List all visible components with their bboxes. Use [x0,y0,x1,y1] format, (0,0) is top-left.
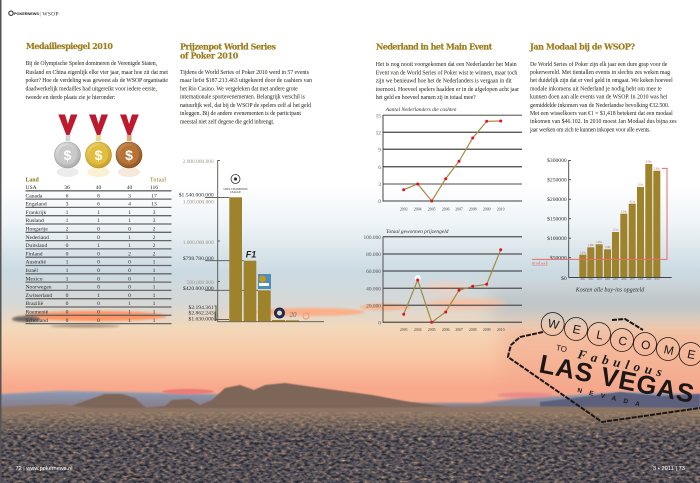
bar chart: kosten alle buy-ins: 2002 [588,278,594,281]
medal table: 1 [128,235,131,241]
medal table: 1 [97,210,100,216]
intro text: Het is nog nooit voorgekomen dat een Nederlander het Main [376,62,517,68]
medal table: 40 [96,185,102,191]
bar chart: kosten alle buy-ins: 2001 [580,278,586,281]
line chart: totaal gewonnen prijzengeld: 2007 [455,328,463,332]
intro text: Event van de World Series of Poker wist te winnen, maar toch [376,69,517,76]
medal table: 0 [128,285,131,291]
icon: event logo: 20 [290,311,297,319]
medal table: 1 [128,218,131,224]
bar chart: prize pools: $798.780.000 [183,255,214,262]
bar chart: kosten alle buy-ins: $50000 [550,255,567,262]
line chart: totaal gewonnen prijzengeld: 2010 [497,328,505,332]
medal table: 0 [97,301,100,307]
bar chart: kosten alle buy-ins: $200000 [547,196,567,203]
bar chart: kosten alle buy-ins: 6,29x [646,161,652,164]
heading: Nederland in het Main Event [376,42,493,52]
icon: F1 logo: F1 [246,250,256,260]
line chart: totaal gewonnen prijzengeld: 20.000 [366,304,381,310]
medal table: 0 [97,226,100,232]
medal table: 0 [97,285,100,291]
medal table: 0 [66,293,69,299]
medal table: Finland [26,251,43,257]
illustration: Welcome to Fabulous Las Vegas sign: E [686,347,697,362]
bar chart: prize pools: $1.630.000 [189,316,214,323]
medal table: 0 [128,293,131,299]
medal table: 1 [153,301,156,307]
bar chart: prize pools: $420.000.000 [183,285,214,292]
medal table: 13 [151,202,157,208]
medal table: 0 [66,310,69,316]
medal table: 2 [153,226,156,232]
line chart: totaal gewonnen prijzengeld: 2009 [483,328,491,332]
medal table: 0 [97,276,100,282]
intro text: Rusland en China eigenlijk elke vier jaar, maar hoe zit dat met [26,70,168,76]
medal table: 1 [66,210,69,216]
medal table: 8 [97,193,100,199]
line chart: totaal gewonnen prijzengeld: 100.000 [363,235,381,241]
illustration: Welcome to Fabulous Las Vegas sign: W [547,316,561,332]
bar chart: kosten alle buy-ins: 2006 [621,278,627,281]
medal table: 3 [128,193,131,199]
line chart: aantal Nederlanders die cashten: 2004 [414,207,422,211]
bar chart: kosten alle buy-ins: 2007 [630,278,635,281]
medal table: Rusland [26,218,44,224]
medal table: 4 [128,202,131,208]
line chart: aantal Nederlanders die cashten [376,107,522,211]
intro text: zijn we benieuwd hoe het de Nederlanders is vergaan in dit [376,79,512,85]
medal table: Hongarije [26,226,48,232]
medal table: 0 [66,243,69,249]
line chart: totaal gewonnen prijzengeld: 2003 [400,328,408,332]
line chart: aantal Nederlanders die cashten: 0 [378,199,381,205]
intro text [180,69,312,125]
bar chart: kosten alle buy-ins: 1,24x [580,252,586,254]
bar chart: kosten alle buy-ins: 2004 [605,278,611,281]
line chart: aantal Nederlanders die cashten: 6 [378,165,381,171]
medal table: Schotland [26,318,48,324]
medal table: 6 [66,193,69,199]
medal table: Mexico [26,276,43,282]
header: publication logo and section: POKERNEWS [14,11,39,16]
line chart: totaal gewonnen prijzengeld: 2008 [469,328,477,332]
illustration: Welcome to Fabulous Las Vegas sign: Fabulous [575,346,664,380]
icon: silver medal [54,114,80,177]
illustration: Welcome to Fabulous Las Vegas sign: NEVADA [577,387,641,408]
illustration: Welcome to Fabulous Las Vegas sign: M [662,342,675,358]
heading [180,42,276,60]
medal table: Totaal [150,178,166,184]
intro text: Bij de Olympische Spelen domineren de Verenigde Staten, [26,61,158,67]
line chart: aantal Nederlanders die cashten: 2003 [400,207,408,211]
medal table: Israël [26,268,38,274]
intro text: het Rio Casino. We vergeleken dat met andere grote [180,86,298,92]
header: publication logo and section: | WSOP [40,11,58,17]
icon: Champions League logo [223,174,248,194]
medal table: 1 [97,218,100,224]
medal table: 2 [153,243,156,249]
line chart: totaal gewonnen prijzengeld: 40.000 [366,286,381,292]
intro text: Met een wisselkoers van €1 = $1,418 betekent dat een modaal [530,110,673,117]
medal table: 1 [153,260,156,266]
intro text: kunnen doen aan alle events van de WSOP. In 2010 was het [530,95,668,101]
medal table: 36 [64,185,70,191]
bar chart: kosten alle buy-ins: 5,01x [638,184,644,187]
medal table: 0 [128,276,131,282]
medal table: 1 [153,318,156,324]
panel: Prijzenpot World Series of Poker 2010 [179,42,324,323]
intro text: natuurlijk wel, dat bij de WSOP de spelers zelf al het geld [180,102,311,109]
medal table: 0 [97,268,100,274]
icon: silver medal: $ [64,147,72,163]
medal table: 1 [153,293,156,299]
medal table: 2 [153,251,156,257]
medal table: 1 [128,243,131,249]
medal table: 0 [97,235,100,241]
icon: ring logo [303,313,309,319]
medal table: 0 [66,301,69,307]
line chart: aantal Nederlanders die cashten: 2009 [483,207,491,211]
medal table: 3 [66,202,69,208]
panel: Jan Modaal bij de WSOP? [529,42,677,294]
line chart: aantal Nederlanders die cashten: 2008 [469,207,477,211]
medal table: Australië [26,260,47,266]
medal table: 1 [128,310,131,316]
medal table: Canada [26,193,43,199]
icon: bronze medal [116,114,142,177]
intro text [529,61,677,133]
intro text: internationale sportevenementen. Belangrijk verschil is [180,95,306,101]
medal table: 2 [153,235,156,241]
medal table: 0 [128,226,131,232]
medal table: Nederland [26,235,49,241]
intro text: tweede en derde plaats zie je hieronder: [26,95,116,101]
line chart: totaal gewonnen prijzengeld: 0 [378,320,381,326]
bar chart: kosten alle buy-ins: 2010 [654,278,660,281]
illustration: Welcome to Fabulous Las Vegas sign: E [571,322,582,337]
medal table: Land [26,178,39,184]
medal table: 1 [128,301,131,307]
intro text: toernooi. Hoeveel spelers haalden er in de afgelopen acht jaar [376,86,519,93]
icon: gold medal: $ [95,147,103,163]
intro text: poker? Hoe de verdeling was geweest als de WSOP organisatie [26,78,168,84]
intro text: inkomen van $46.102. In 2010 moest Jan Modaal dus bijna zes [530,118,677,125]
bar chart: prize pools: $2.194.361 [189,304,214,311]
line chart: totaal gewonnen prijzengeld: Totaal gewonnen prijzengeld [386,229,449,235]
bar chart: kosten alle buy-ins: 4,11x [629,200,636,203]
medal table: 0 [97,260,100,266]
medal table: 3 [153,218,156,224]
icon: World Cup logo [258,274,271,289]
chart caption: Kosten alle buy-ins opgeteld [575,288,645,294]
footer: left page number: 72 | www.pokernews.nl [16,466,72,472]
heading: Jan Modaal bij de WSOP? [529,42,635,52]
intro text [376,62,519,101]
medal table: 1 [97,293,100,299]
line chart: aantal Nederlanders die cashten: 2005 [428,207,436,211]
medal table: 0 [97,310,100,316]
callout: modaal inkomen line: modaal [532,262,547,266]
bar chart: kosten alle buy-ins: $0 [561,275,567,282]
bar chart: kosten alle buy-ins: 3,54x [621,210,627,213]
line chart: totaal gewonnen prijzengeld: 2006 [442,328,450,332]
medal table: Frankrijk [26,210,47,216]
illustration: Welcome to Fabulous Las Vegas sign: O [640,337,652,353]
heading: of Poker 2010 [180,50,239,60]
medal table: 1 [66,268,69,274]
line chart: aantal Nederlanders die cashten: 2010 [497,207,505,211]
medal table: 1 [128,318,131,324]
intro text: daadwerkelijk medailles had uitgereikt voor iedere eerste, [26,87,158,93]
medal table: 0 [97,318,100,324]
bar chart: kosten alle buy-ins: 2,51x [613,229,619,232]
heading: Medaillespiegel 2010 [26,41,113,51]
intro text: maar liefst $187.213.463 uitgekeerd door de cashiers van [180,77,312,84]
illustration: Welcome to Fabulous Las Vegas sign: TO [555,343,568,354]
medal table: Noorwegen [26,285,52,291]
icon: Champions League logo: UEFA CHAMPIONS [223,188,248,191]
medal table: 1 [153,276,156,282]
line chart: aantal Nederlanders die cashten: 9 [378,148,381,154]
intro text: gemiddelde inkomen van de Nederlandse bevolking €32.500. [530,103,670,109]
medal table: 6 [97,202,100,208]
line chart: aantal Nederlanders die cashten: 3 [378,182,381,188]
bar chart: kosten alle buy-ins: $250000 [547,176,567,184]
line chart: aantal Nederlanders die cashten: Aantal Nederlanders die cashten [385,107,457,113]
line chart: totaal gewonnen prijzengeld: 2005 [428,328,436,332]
medal table: Brazilië [26,301,44,307]
medal table: 2 [128,251,131,257]
bar chart: kosten alle buy-ins: 2008 [638,278,644,281]
heading: Prijzenpot World Series [180,42,276,52]
medal table: 1 [66,285,69,291]
medal table: Roemenië [26,310,49,316]
medal table: 40 [127,185,132,191]
medal table: Zwitserland [26,293,52,299]
illustration: Welcome to Fabulous Las Vegas sign [508,312,700,422]
intro text: modale inkomens uit Nederland je nodig hebt om mee te [530,86,662,92]
medal table: 1 [66,218,69,224]
intro text [26,61,168,101]
medal table: 1 [97,243,100,249]
bar chart: kosten alle buy-ins: 2005 [613,278,619,281]
bar chart: kosten alle buy-ins [532,157,672,294]
panel: Medaillespiegel 2010 [26,41,172,324]
intro text: inleggen. Bij de andere evenementen is de participant [180,111,301,117]
medal table: 17 [151,193,157,199]
illustration: Welcome to Fabulous Las Vegas sign: LAS VEGAS [537,348,697,409]
panel: Nederland in het Main Event [363,42,522,332]
header: publication logo and section [9,11,59,17]
bar chart: kosten alle buy-ins: 1,85x [596,241,603,244]
medal table: 1 [128,210,131,216]
medal table: 1 [153,285,156,291]
medal table: 0 [128,268,131,274]
bar chart: prize pools: $1.540.000.000 [179,192,214,199]
bar chart: kosten alle buy-ins: 1,68x [588,244,594,247]
medal table: 0 [66,251,69,257]
bar chart: prize pools: 500.000.000 [187,280,214,286]
bar chart: prize pools: 1.500.000.000 [183,200,214,206]
medal table: 2 [66,226,69,232]
illustration: Welcome to Fabulous Las Vegas sign: L [595,328,605,343]
line chart: totaal gewonnen prijzengeld: 80.000 [366,252,381,258]
intro text: het duidelijk zijn dat er veel geld in omgaat. We keken hoeveel [530,78,673,84]
bar chart: kosten alle buy-ins: 2009 [646,278,652,281]
medal table: 1 [66,260,69,266]
medal table: Duitsland [26,243,47,249]
medal table: 3 [153,210,156,216]
medal table: 1 [66,276,69,282]
footer: right page number: 3 • 2011 | 73 [653,466,685,472]
icon: seal logo [274,308,285,318]
icon: bronze medal: $ [125,147,133,163]
bar chart: prize pools: 1.000.000.000 [183,240,214,246]
bar chart: kosten alle buy-ins: 1,59x [605,246,611,249]
icon: gold medal [86,114,112,177]
bar chart: kosten alle buy-ins: 5,92x [654,167,660,170]
bar chart: kosten alle buy-ins: $300000 [547,157,567,164]
line chart: totaal gewonnen prijzengeld: 2004 [414,328,422,332]
bar chart: prize pools: $2.862.243 [189,310,214,317]
intro text: De World Series of Poker zijn elk jaar een dure grap voor de [530,61,668,68]
bar chart: kosten alle buy-ins: $150000 [547,216,567,222]
medal table: 1 [153,310,156,316]
bar chart: prize pools: 2.000.000.000 [183,159,214,165]
medal table: 0 [128,260,131,266]
medal table: 1 [66,235,69,241]
illustration: Welcome to Fabulous Las Vegas sign: C [617,333,629,349]
line chart: aantal Nederlanders die cashten: 2007 [455,207,463,211]
intro text: meestal niet zelf degene die geld inbrengt. [180,118,275,125]
icon: Champions League logo: LEAGUE [230,191,241,194]
line chart: aantal Nederlanders die cashten: 12 [376,130,381,136]
bar chart: prize pools [179,159,324,323]
bar chart: kosten alle buy-ins: 2003 [597,278,602,281]
intro text: het geld en hoeveel namen zij in totaal mee? [376,95,476,101]
medal table: Engeland [26,202,47,208]
line chart: aantal Nederlanders die cashten: 15 [376,114,381,120]
medal table: 0 [97,251,100,257]
line chart: aantal Nederlanders die cashten: 2006 [442,207,450,211]
intro text: Tijdens de World Series of Poker 2010 werd in 57 events [180,69,310,76]
intro text: jaar werken om zich te kunnen inkopen voor alle events. [529,127,651,133]
line chart: totaal gewonnen prijzengeld [363,229,522,332]
medal table: 1 [153,268,156,274]
bar chart: kosten alle buy-ins: $100000 [547,235,567,242]
medal table: 116 [150,185,158,191]
medal table: 0 [66,318,69,324]
medal table [26,178,172,324]
intro text: pokerwereld. Met tientallen events in slechts zes weken mag [530,70,670,76]
line chart: totaal gewonnen prijzengeld: 60.000 [366,269,381,275]
medal table: USA [26,185,37,191]
